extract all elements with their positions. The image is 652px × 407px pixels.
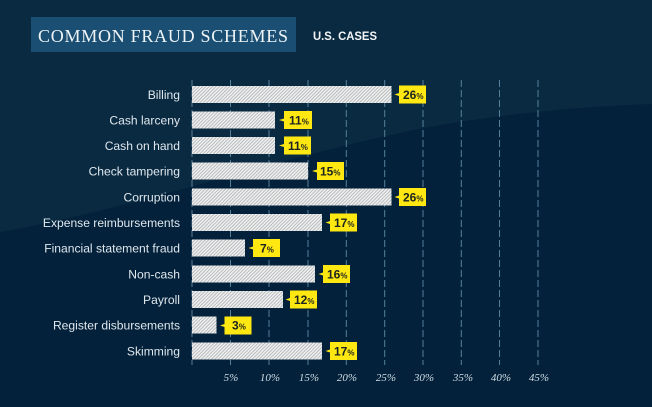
x axis labels: 35% bbox=[452, 372, 473, 384]
row: Non-cash: 16% bbox=[327, 268, 347, 282]
row: Non-cash: Non-cash bbox=[128, 268, 180, 282]
x axis labels: 40% bbox=[491, 372, 511, 384]
row: Check tampering: 15% bbox=[320, 164, 340, 178]
row: Non-cash bbox=[128, 265, 350, 283]
row: Skimming: Skimming bbox=[127, 344, 180, 358]
x axis labels bbox=[224, 372, 549, 384]
row: Cash larceny: 11% bbox=[289, 114, 309, 128]
row: Expense reimbursements: 17% bbox=[334, 216, 354, 230]
x axis labels: 25% bbox=[376, 372, 396, 384]
x axis labels: 30% bbox=[413, 372, 434, 384]
x axis labels: 10% bbox=[260, 372, 280, 384]
row: Expense reimbursements: Expense reimbursements bbox=[43, 216, 180, 230]
row: Register disbursements: 3% bbox=[232, 318, 246, 332]
row: Billing bbox=[148, 86, 426, 104]
row: Cash larceny: Cash larceny bbox=[109, 114, 181, 128]
row: Corruption bbox=[124, 188, 426, 206]
x axis labels: 5% bbox=[224, 372, 238, 384]
row: Cash larceny bbox=[109, 111, 312, 129]
row: Financial statement fraud: 7% bbox=[260, 242, 274, 256]
row: Skimming: 17% bbox=[334, 344, 354, 358]
grid lines bbox=[192, 80, 538, 365]
row: Corruption: Corruption bbox=[124, 190, 180, 204]
title: COMMON FRAUD SCHEMES bbox=[38, 26, 288, 46]
row: Billing: 26% bbox=[403, 88, 423, 102]
row: Payroll: Payroll bbox=[143, 293, 180, 307]
row: Financial statement fraud: Financial statement fraud bbox=[44, 242, 180, 256]
row: Cash on hand bbox=[105, 136, 311, 154]
row: Cash on hand: 11% bbox=[288, 139, 308, 153]
x axis labels: 45% bbox=[529, 372, 549, 384]
row: Financial statement fraud bbox=[44, 239, 280, 257]
subtitle: U.S. CASES bbox=[313, 29, 377, 43]
row: Payroll bbox=[143, 290, 317, 308]
row: Payroll: 12% bbox=[294, 293, 314, 307]
title bbox=[31, 17, 296, 52]
row: Check tampering bbox=[89, 162, 344, 180]
x axis labels: 15% bbox=[299, 372, 319, 384]
row: Register disbursements bbox=[53, 316, 252, 334]
row: Check tampering: Check tampering bbox=[89, 164, 180, 178]
x axis labels: 20% bbox=[337, 372, 357, 384]
row: Expense reimbursements bbox=[43, 214, 357, 232]
row: Register disbursements: Register disbursements bbox=[53, 318, 180, 332]
row: Billing: Billing bbox=[148, 88, 180, 102]
row: Cash on hand: Cash on hand bbox=[105, 139, 180, 153]
row: Skimming bbox=[127, 342, 357, 360]
row: Corruption: 26% bbox=[403, 190, 423, 204]
